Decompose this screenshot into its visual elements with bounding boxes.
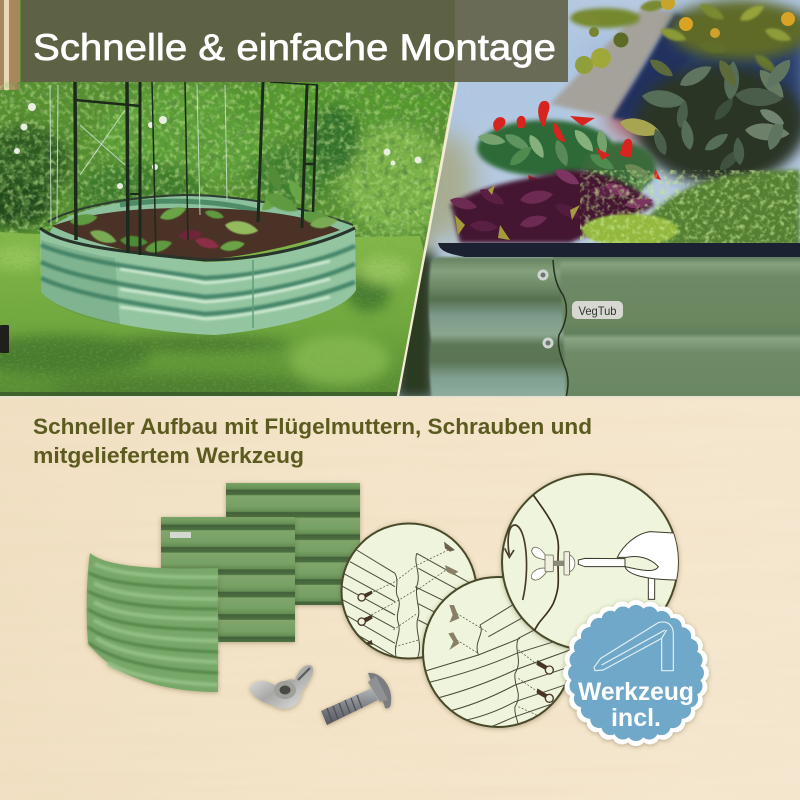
VegTub label [572, 301, 623, 319]
hand with tool [648, 577, 655, 599]
trellis bars [75, 82, 318, 255]
dandelions [14, 103, 422, 189]
panel: front curved corrugated sheet [87, 553, 218, 692]
callout circle: sheets bolted at curve (bottom) [423, 577, 573, 733]
raised bed back wall [50, 196, 352, 250]
lime green bush [580, 170, 800, 246]
dark pot at left [0, 325, 9, 353]
badge: tool included [573, 610, 699, 736]
corrugated sage wall right part [553, 257, 800, 398]
subheading: Schneller Aufbau mit Flügelmuttern, Schrauben und [33, 414, 592, 439]
trellis wires [50, 85, 227, 225]
shrubs background [0, 77, 450, 235]
red pepper plant [477, 101, 661, 217]
VegTub label: VegTub [578, 304, 617, 318]
wing nut [250, 665, 313, 709]
panel: middle flat corrugated sheet [161, 517, 295, 642]
rotation arrow [508, 525, 527, 600]
bolt [321, 673, 391, 725]
purple foliage [449, 165, 655, 243]
soil and plants [52, 208, 340, 260]
blurred left edge [399, 213, 445, 396]
badge: tool included: incl. [611, 704, 661, 732]
wood background [0, 396, 800, 800]
panel: back flat corrugated sheet [226, 483, 360, 605]
wooden post [0, 0, 20, 90]
base strip under photos [0, 396, 800, 398]
blurred grey pole [550, 5, 675, 118]
subheading: mitgeliefertem Werkzeug [33, 443, 304, 468]
seam between panels [553, 260, 568, 398]
callout circle: second sheet joined to third (top-left) [340, 524, 477, 658]
wing nut and bolt drawing [531, 547, 547, 580]
fruits [575, 0, 795, 74]
blurred background [415, 0, 800, 240]
screws [358, 542, 458, 645]
callout circle: tightening with tool and wing nut [502, 474, 680, 650]
subheading [33, 414, 592, 468]
left photo: raised bed with trellis in a garden [0, 0, 480, 402]
tub black rim [438, 243, 800, 257]
right photo: close-up of bed with plants [395, 0, 800, 400]
icon: hex key tool [594, 622, 673, 671]
fruit branch foliage at top [570, 0, 800, 77]
dark leafy plant [618, 56, 800, 185]
title banner [21, 0, 568, 82]
sheet edge [533, 495, 558, 633]
badge label: Werkzeug [578, 678, 694, 706]
raised bed front corrugated wall [40, 228, 356, 335]
blurred sage wall left part [429, 257, 566, 398]
bolts [538, 270, 554, 348]
title: Schnelle & einfache Montage [33, 27, 556, 68]
diagonal divider between photos [398, 82, 457, 396]
shadows on front wall [41, 240, 120, 325]
lawn [0, 232, 424, 392]
